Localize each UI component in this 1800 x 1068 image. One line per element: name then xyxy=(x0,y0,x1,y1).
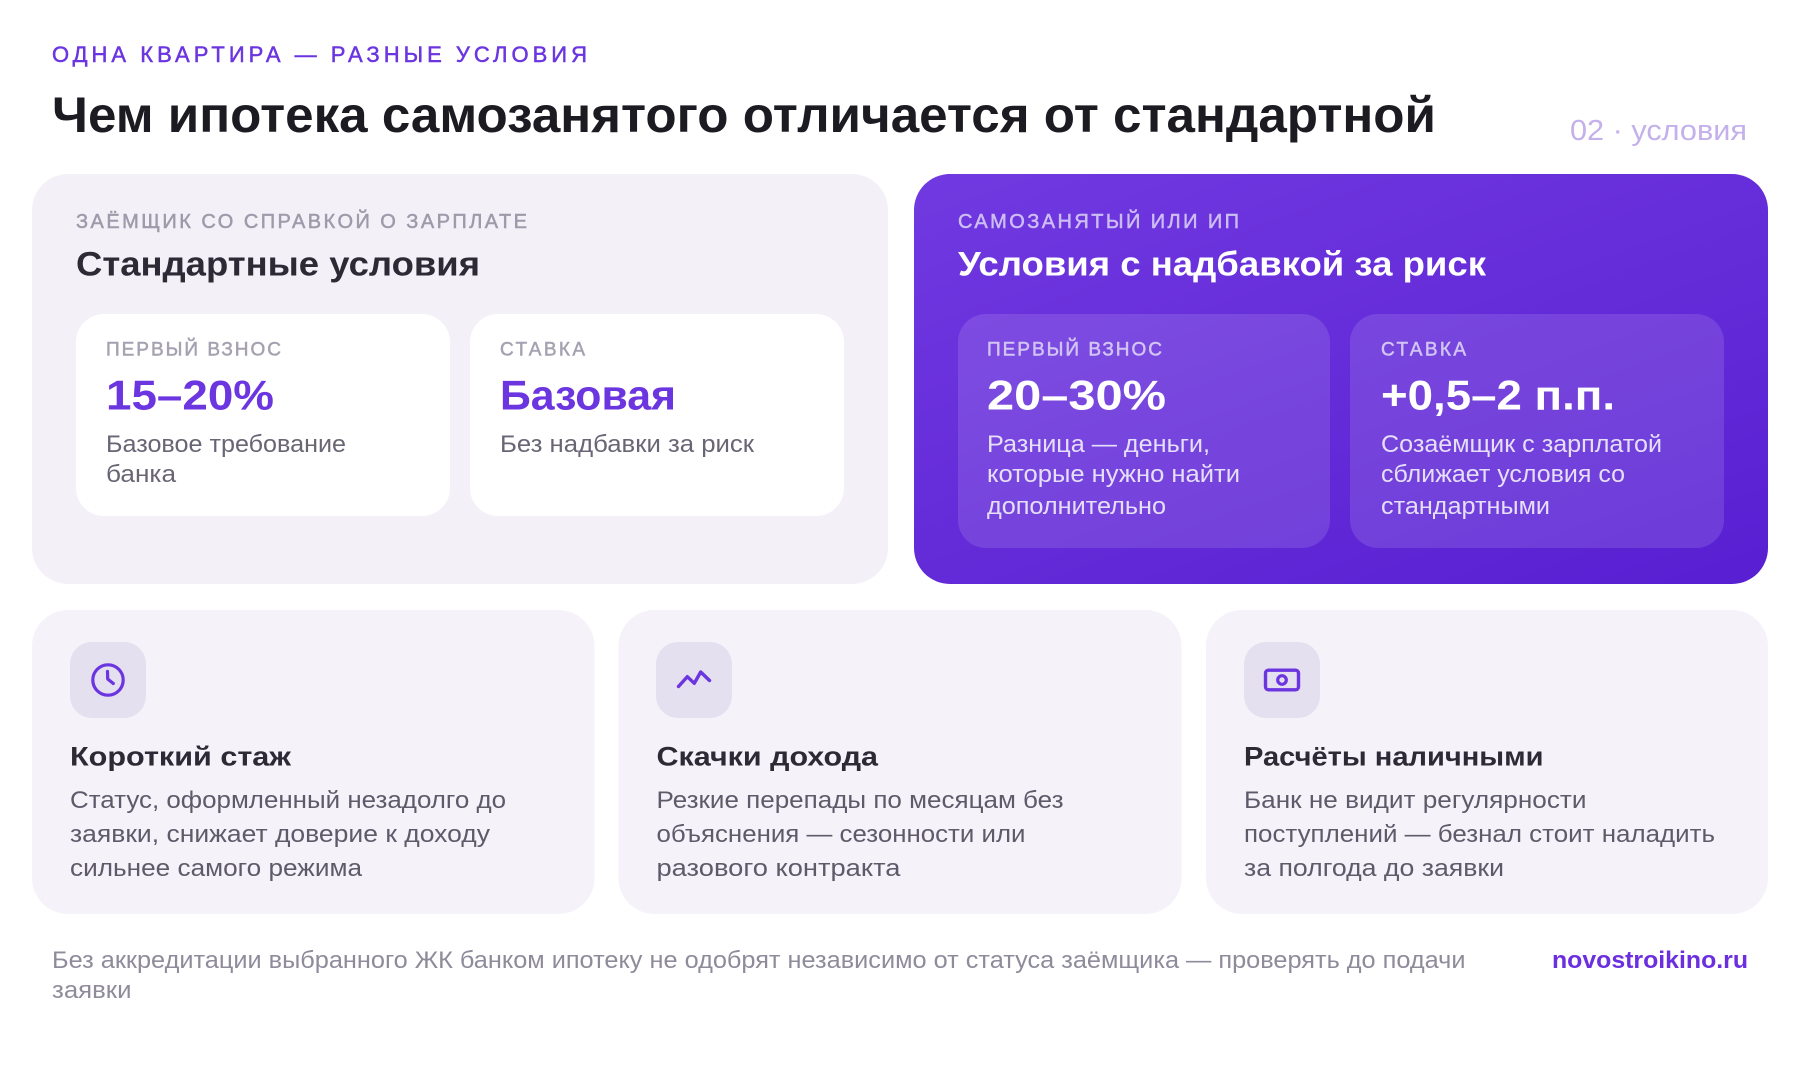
panel: short work history xyxy=(32,610,594,914)
page marker: 02 · условия xyxy=(1570,115,1747,147)
panel label: САМОЗАНЯТЫЙ ИЛИ ИП xyxy=(958,209,1239,233)
panel heading: Условия с надбавкой за риск xyxy=(958,246,1487,284)
panel: cash payments xyxy=(1206,610,1768,914)
site name: novostroikino.ru xyxy=(1552,947,1748,974)
panel label: ЗАЁМЩИК СО СПРАВКОЙ О ЗАРПЛАТЕ xyxy=(76,209,527,233)
card description: поступлений — безнал стоит наладить xyxy=(1244,821,1715,848)
card description: Созаёмщик с зарплатой xyxy=(1381,431,1662,458)
card value: +0,5–2 п.п. xyxy=(1381,372,1615,418)
card label: СТАВКА xyxy=(500,340,585,360)
card heading: Скачки дохода xyxy=(656,742,878,772)
card description: банка xyxy=(106,461,177,488)
card label: СТАВКА xyxy=(1381,340,1466,360)
card label: ПЕРВЫЙ ВЗНОС xyxy=(987,338,1162,360)
footnote: Без аккредитации выбранного ЖК банком ипотеку не одобрят независимо от статуса заёмщика — проверять до подачи xyxy=(52,947,1466,974)
card: down payment standard xyxy=(76,314,450,516)
card description: Банк не видит регулярности xyxy=(1244,787,1586,814)
panel: standard conditions xyxy=(32,174,888,584)
title: Чем ипотека самозанятого отличается от стандартной xyxy=(52,87,1436,143)
card description xyxy=(1244,787,1715,882)
card heading: Расчёты наличными xyxy=(1244,742,1544,772)
card description: стандартными xyxy=(1381,493,1550,520)
card description: за полгода до заявки xyxy=(1244,855,1504,882)
card description: сближает условия со xyxy=(1381,461,1625,488)
header xyxy=(52,42,1747,147)
card value: Базовая xyxy=(500,372,676,418)
card description: которые нужно найти xyxy=(987,461,1240,488)
card description: разового контракта xyxy=(656,855,901,882)
card value: 15–20% xyxy=(106,372,274,418)
card: rate self-employed xyxy=(1350,314,1724,548)
footnote xyxy=(52,947,1466,1004)
panel: income spikes xyxy=(618,610,1182,914)
card description: заявки, снижает доверие к доходу xyxy=(70,821,491,848)
footnote: заявки xyxy=(52,977,132,1004)
card heading: Короткий стаж xyxy=(70,742,292,772)
card description xyxy=(70,787,506,882)
eyebrow: ОДНА КВАРТИРА — РАЗНЫЕ УСЛОВИЯ xyxy=(52,42,587,67)
card: down payment self-employed xyxy=(958,314,1330,548)
card description: Без надбавки за риск xyxy=(500,431,755,458)
card description: Базовое требование xyxy=(106,431,346,458)
card description: сильнее самого режима xyxy=(70,855,362,882)
card description: дополнительно xyxy=(987,493,1166,520)
card description xyxy=(656,787,1064,882)
card description: Резкие перепады по месяцам без xyxy=(656,787,1064,814)
card value: 20–30% xyxy=(987,372,1166,418)
card: rate standard xyxy=(470,314,844,516)
card description xyxy=(106,431,346,488)
card description xyxy=(987,431,1240,520)
panel: self-employed conditions xyxy=(914,174,1768,584)
icon: banknote xyxy=(1244,642,1320,718)
panel heading: Стандартные условия xyxy=(76,246,480,284)
card description: Статус, оформленный незадолго до xyxy=(70,787,506,814)
icon: clock xyxy=(70,642,146,718)
icon: zigzag chart xyxy=(656,642,732,718)
card description xyxy=(1381,431,1662,520)
card description: объяснения — сезонности или xyxy=(656,821,1026,848)
card description: Разница — деньги, xyxy=(987,431,1210,458)
card label: ПЕРВЫЙ ВЗНОС xyxy=(106,338,281,360)
